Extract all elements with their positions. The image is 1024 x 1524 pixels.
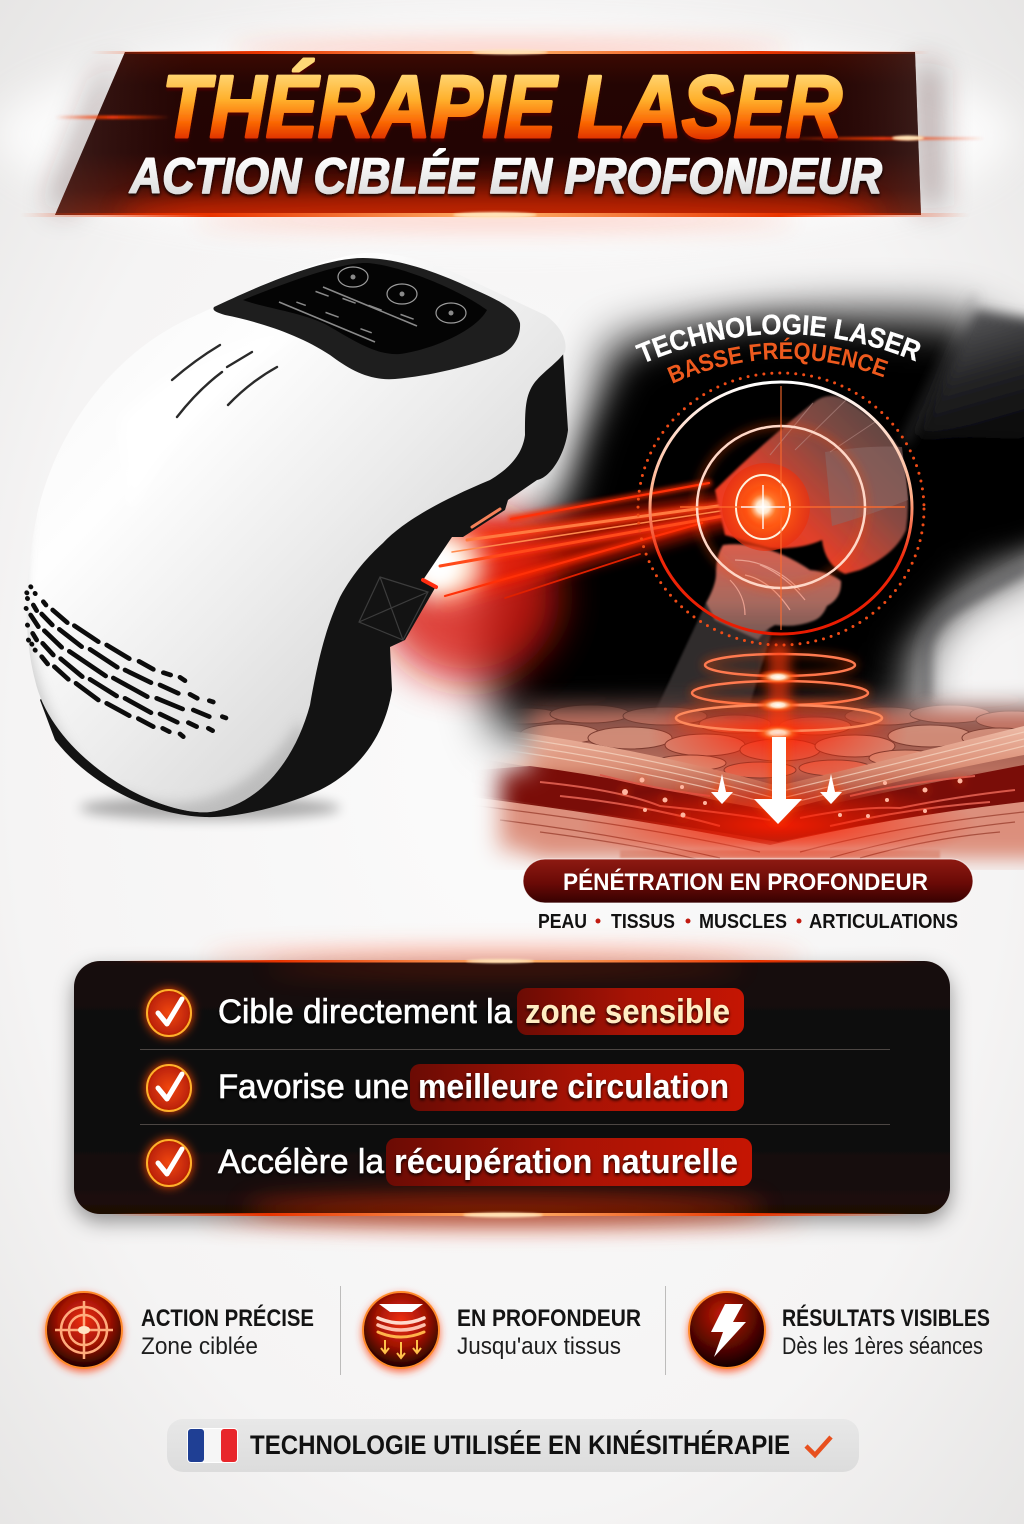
tissue list: ARTICULATIONS — [809, 911, 958, 933]
tissue list: TISSUS — [611, 911, 675, 933]
title text: THÉRAPIE LASER — [162, 57, 842, 156]
check icon 2 — [147, 1065, 191, 1111]
feature text — [782, 1304, 990, 1360]
big down arrow — [754, 737, 802, 824]
feature text: ACTION PRÉCISE — [141, 1304, 314, 1332]
skin cells — [520, 706, 1024, 778]
tissue list — [538, 911, 958, 933]
feature text: EN PROFONDEUR — [457, 1305, 641, 1332]
banner glow lines — [20, 50, 985, 218]
red indicators — [423, 509, 500, 587]
white shell — [0, 253, 566, 830]
icon: target — [46, 1292, 122, 1368]
check icon 1 — [147, 990, 191, 1036]
title banner — [0, 30, 1015, 243]
red hot zones — [658, 698, 898, 778]
benefit 1: zone sensible — [525, 993, 730, 1031]
tissue list: MUSCLES — [699, 911, 787, 933]
icon: depth layers — [363, 1292, 439, 1368]
red sparkle dots — [622, 778, 962, 818]
arc heading: basse fréquence: BASSE FRÉQUENCE — [667, 338, 888, 384]
tissue layers — [480, 688, 1024, 870]
feature text: Jusqu'aux tissus — [457, 1333, 621, 1360]
penetration pill: PÉNÉTRATION EN PROFONDEUR — [563, 868, 928, 896]
penetration pill — [523, 859, 973, 903]
feature text — [141, 1304, 314, 1360]
dark backdrop — [480, 315, 1024, 735]
small down arrow right — [820, 774, 842, 804]
benefit 2 — [147, 1064, 744, 1111]
deep layer — [488, 765, 1024, 842]
depth ripples — [676, 640, 882, 742]
small down arrow left — [711, 774, 733, 804]
feature: action précise — [46, 1292, 314, 1368]
leg silhouette — [655, 295, 1024, 720]
benefits panel — [74, 948, 950, 1228]
feature: résultats visibles — [689, 1292, 990, 1368]
benefit 3 — [147, 1138, 752, 1186]
control panel — [213, 258, 520, 379]
benefit 2: Favorise une — [218, 1068, 409, 1106]
certification pill: TECHNOLOGIE UTILISÉE EN KINÉSITHÉRAPIE — [250, 1429, 790, 1460]
feature text: Zone ciblée — [141, 1333, 258, 1360]
benefit 1 — [147, 988, 744, 1036]
arc heading: technologie laser: TECHNOLOGIE LASER — [634, 314, 920, 362]
product: knee laser device — [0, 253, 568, 830]
feature text — [457, 1305, 641, 1360]
top vents — [172, 345, 277, 417]
subtitle text: ACTION CIBLÉE EN PROFONDEUR — [128, 148, 882, 204]
feature text: Dès les 1ères séances — [782, 1333, 983, 1360]
side vents — [26, 587, 226, 737]
certification pill — [167, 1419, 859, 1472]
icon: french flag — [187, 1428, 238, 1463]
knee joint — [706, 396, 908, 640]
icon: orange check — [806, 1437, 831, 1455]
tissue list: PEAU — [538, 911, 587, 933]
laser beams — [376, 483, 745, 683]
icon: lightning bolt — [689, 1292, 765, 1368]
feature: en profondeur — [363, 1292, 641, 1368]
black strap — [40, 350, 568, 817]
benefit 2: meilleure circulation — [418, 1068, 729, 1106]
check icon 3 — [147, 1140, 191, 1186]
benefit 3: Accélère la — [218, 1143, 384, 1181]
target rings — [638, 373, 924, 645]
benefit 1: Cible directement la — [218, 993, 512, 1031]
benefit 3: récupération naturelle — [394, 1143, 738, 1181]
device shadow — [80, 796, 340, 820]
bottom band — [482, 799, 1024, 858]
strap buckle — [359, 577, 428, 640]
muscle band — [506, 726, 1024, 809]
laser illustration — [390, 274, 1024, 870]
